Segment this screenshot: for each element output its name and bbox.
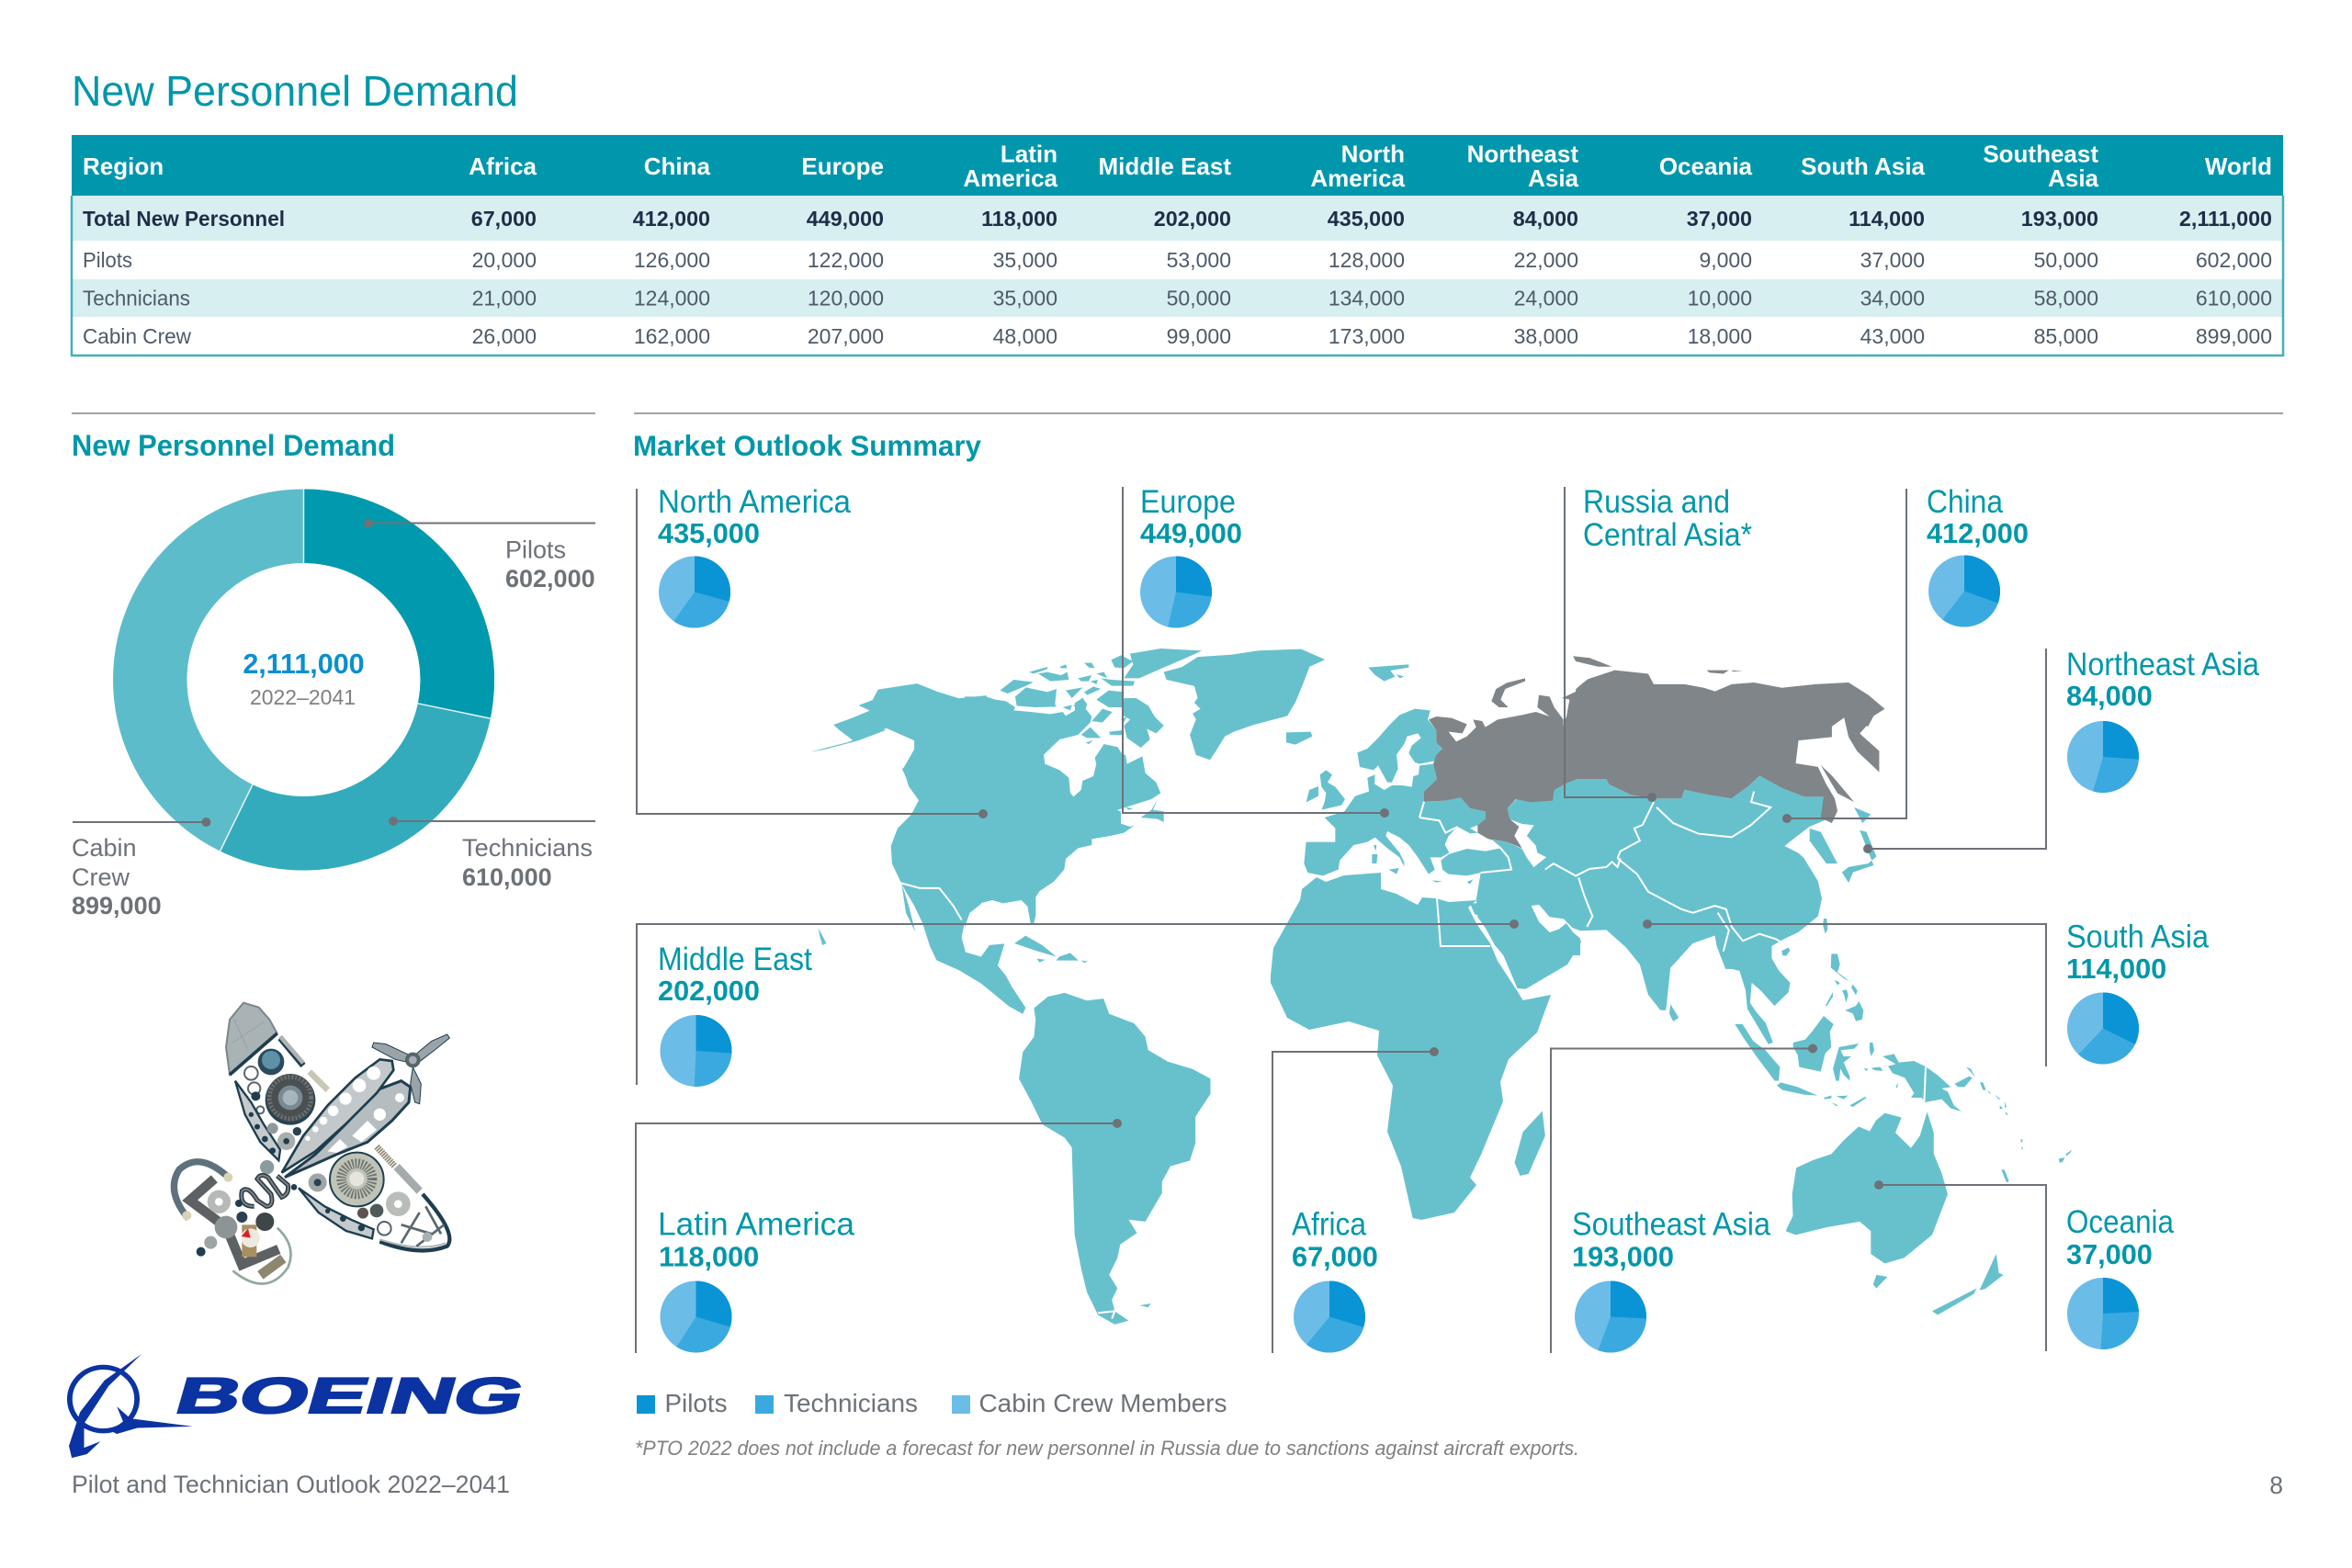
table: new personnel demand by region: Latin [1001, 140, 1057, 167]
table: new personnel demand by region: 22,000 [1514, 248, 1578, 272]
table: new personnel demand by region: 10,000 [1688, 287, 1752, 310]
table: new personnel demand by region: 193,000 [2021, 207, 2098, 231]
caribbean and south america [819, 928, 1211, 1325]
madagascar, sri lanka, australia, new zealand [1514, 1004, 2004, 1314]
legend: Pilots [665, 1389, 728, 1417]
table: new personnel demand by region: 48,000 [993, 324, 1057, 348]
callout: pilots: 602,000 [505, 565, 595, 592]
table: new personnel demand by region: Pilots [83, 248, 132, 272]
russia and central asia (grey) [1424, 656, 1884, 848]
table: new personnel demand by region: 26,000 [472, 324, 537, 348]
table: new personnel demand by region: 124,000 [634, 287, 710, 310]
table: new personnel demand by region: 18,000 [1688, 324, 1752, 348]
table: new personnel demand by region: 24,000 [1514, 287, 1578, 310]
panel: south asia: 114,000 [2066, 953, 2166, 985]
table: new personnel demand by region: 202,000 [1154, 207, 1231, 231]
table: new personnel demand by region: 50,000 [1167, 287, 1231, 310]
north america east and arctic islands [965, 649, 1202, 928]
heading: market outlook summary: Market Outlook Summary [633, 429, 981, 462]
panel: southeast asia: Southeast Asia [1572, 1205, 1770, 1242]
panel: north america: 435,000 [658, 517, 760, 549]
table: new personnel demand by region: 37,000 [1687, 207, 1752, 231]
legend [637, 1389, 1227, 1417]
panel: south asia [1643, 919, 2209, 1066]
panel: middle east: Middle East [658, 941, 812, 977]
pie: northeast asia [2086, 739, 2120, 775]
table: new personnel demand by region: 207,000 [808, 324, 884, 348]
table: new personnel demand by region: 114,000 [1849, 207, 1925, 231]
table: new personnel demand by region: Cabin Crew [83, 324, 191, 348]
pie: southeast asia [1593, 1299, 1628, 1335]
table: new personnel demand by region: Asia [2048, 164, 2099, 192]
panel: africa: 67,000 [1292, 1240, 1378, 1273]
panel: southeast asia [1551, 1043, 1817, 1353]
footer: publication title: Pilot and Technician Outlook 2022–2041 [72, 1471, 510, 1498]
table: new personnel demand by region [72, 135, 2283, 355]
table: new personnel demand by region: 35,000 [993, 287, 1057, 310]
table: new personnel demand by region: Africa [469, 152, 537, 180]
table: new personnel demand by region: 37,000 [1860, 248, 1925, 272]
footnote: *PTO 2022 does not include a forecast for new personnel in Russia due to sanctions against aircraft exports. [635, 1437, 1579, 1460]
panel: russia and central asia [1565, 483, 1752, 802]
table: new personnel demand by region: America [963, 164, 1058, 192]
table: new personnel demand by region: 38,000 [1514, 324, 1578, 348]
panel: africa: Africa [1292, 1205, 1366, 1242]
table: new personnel demand by region: 412,000 [633, 207, 710, 231]
pie: africa [1312, 1299, 1347, 1335]
table: new personnel demand by region: Oceania [1659, 152, 1753, 180]
table: new personnel demand by region: 9,000 [1699, 248, 1752, 272]
table: new personnel demand by region: 21,000 [472, 287, 537, 310]
donut chart [150, 489, 491, 851]
panel: north america: North America [658, 483, 851, 520]
africa [1271, 873, 1551, 1220]
callout: pilots [364, 518, 595, 592]
callout: pilots: Pilots [505, 536, 566, 564]
table: new personnel demand by region: China [644, 152, 711, 180]
panel: oceania [1874, 1180, 2174, 1351]
table: new personnel demand by region: 128,000 [1329, 248, 1405, 272]
panel: latin america: 118,000 [659, 1240, 759, 1273]
panel: oceania: Oceania [2066, 1203, 2174, 1240]
table: new personnel demand by region: 67,000 [471, 207, 537, 231]
panel: latin america [636, 1119, 1122, 1353]
pie: china [1946, 573, 1983, 609]
logo symbol [69, 1354, 193, 1458]
callout: technicians: 610,000 [462, 863, 552, 891]
panel: china [1782, 483, 2029, 823]
table: new personnel demand by region: 134,000 [1329, 287, 1405, 310]
table: new personnel demand by region: 58,000 [2034, 287, 2098, 310]
table: new personnel demand by region: America [1310, 164, 1406, 192]
panel: africa [1272, 1047, 1439, 1353]
logo wordmark: BOEING [170, 1368, 531, 1424]
table: new personnel demand by region: 20,000 [472, 248, 537, 272]
callout: technicians: Technicians [462, 834, 593, 862]
pie: north america [676, 574, 713, 610]
panel: europe: Europe [1140, 483, 1236, 520]
world map [809, 649, 2072, 1325]
panel: oceania: 37,000 [2066, 1238, 2153, 1270]
table: new personnel demand by region: 2,111,000 [2179, 207, 2272, 231]
pie: middle east [678, 1032, 714, 1069]
table: new personnel demand by region: 173,000 [1329, 324, 1405, 348]
panel: north america [637, 483, 988, 818]
panel: middle east [637, 919, 1519, 1085]
panel: northeast asia: Northeast Asia [2066, 646, 2259, 682]
table: new personnel demand by region: Southeast [1983, 140, 2098, 167]
table: new personnel demand by region: 435,000 [1328, 207, 1405, 231]
panel: china: 412,000 [1927, 517, 2029, 549]
table: new personnel demand by region: Total New Personnel [83, 207, 285, 231]
panel: northeast asia [1863, 646, 2259, 853]
table: new personnel demand by region: 449,000 [807, 207, 884, 231]
table: new personnel demand by region: 120,000 [808, 287, 884, 310]
callout: technicians [389, 817, 595, 891]
table: new personnel demand by region: Europe [801, 152, 884, 180]
table: new personnel demand by region: South Asia [1801, 152, 1926, 180]
north america west, mexico, greenland [809, 649, 1325, 1014]
panel: latin america: Latin America [658, 1205, 854, 1242]
table: new personnel demand by region: Technicians [83, 287, 190, 310]
panel: south asia: South Asia [2066, 919, 2209, 955]
panel: russia and central asia: Central Asia* [1583, 516, 1752, 553]
table: new personnel demand by region: 122,000 [808, 248, 884, 272]
table: new personnel demand by region: 34,000 [1860, 287, 1925, 310]
table: new personnel demand by region: 35,000 [993, 248, 1057, 272]
table: new personnel demand by region: Region [83, 152, 164, 180]
table: new personnel demand by region: 99,000 [1167, 324, 1231, 348]
europe and west asia [1286, 664, 1580, 955]
pie: south asia [2086, 1010, 2120, 1046]
legend: Technicians [784, 1389, 918, 1417]
callout: cabin crew: 899,000 [72, 892, 162, 919]
table: new personnel demand by region: Asia [1528, 164, 1579, 192]
table: new personnel demand by region: 126,000 [634, 248, 710, 272]
illustration: airplane made of parts [174, 1003, 449, 1284]
table: new personnel demand by region: 43,000 [1860, 324, 1925, 348]
page number: 8 [2269, 1472, 2283, 1499]
panel: middle east: 202,000 [658, 975, 760, 1007]
callout: cabin crew: Crew [72, 863, 130, 891]
table: new personnel demand by region: 85,000 [2034, 324, 2098, 348]
asia [1495, 775, 1876, 1044]
pie: latin america [678, 1299, 714, 1335]
table: new personnel demand by region: North [1341, 140, 1405, 167]
table: new personnel demand by region: 602,000 [2196, 248, 2272, 272]
table: new personnel demand by region: 118,000 [981, 207, 1057, 231]
panel: europe [1123, 483, 1389, 818]
table: new personnel demand by region: 84,000 [1513, 207, 1578, 231]
pie: oceania [2086, 1295, 2120, 1332]
panel: europe: 449,000 [1140, 517, 1242, 549]
callout: cabin crew [72, 818, 211, 919]
boeing logo [69, 1354, 531, 1458]
heading: new personnel demand: New Personnel Demand [72, 429, 395, 462]
donut center total [243, 649, 365, 709]
table: new personnel demand by region: World [2205, 152, 2272, 180]
table: new personnel demand by region: Northeast [1467, 140, 1578, 167]
panel: southeast asia: 193,000 [1572, 1240, 1674, 1273]
table: new personnel demand by region: 899,000 [2196, 324, 2272, 348]
donut center total: 2022–2041 [250, 685, 356, 709]
title: New Personnel Demand [72, 67, 518, 115]
table: new personnel demand by region: 53,000 [1167, 248, 1231, 272]
panel: northeast asia: 84,000 [2066, 680, 2153, 712]
southeast asia islands [1735, 919, 2072, 1182]
table: new personnel demand by region: 50,000 [2034, 248, 2098, 272]
panel: russia and central asia: Russia and [1583, 483, 1730, 520]
pie: europe [1158, 574, 1194, 610]
table: new personnel demand by region: 162,000 [634, 324, 710, 348]
table: new personnel demand by region: Middle East [1099, 152, 1231, 180]
donut center total: 2,111,000 [243, 649, 365, 680]
table: new personnel demand by region: 610,000 [2196, 287, 2272, 310]
callout: cabin crew: Cabin [72, 834, 137, 862]
legend: Cabin Crew Members [979, 1389, 1227, 1417]
panel: china: China [1927, 483, 2003, 520]
